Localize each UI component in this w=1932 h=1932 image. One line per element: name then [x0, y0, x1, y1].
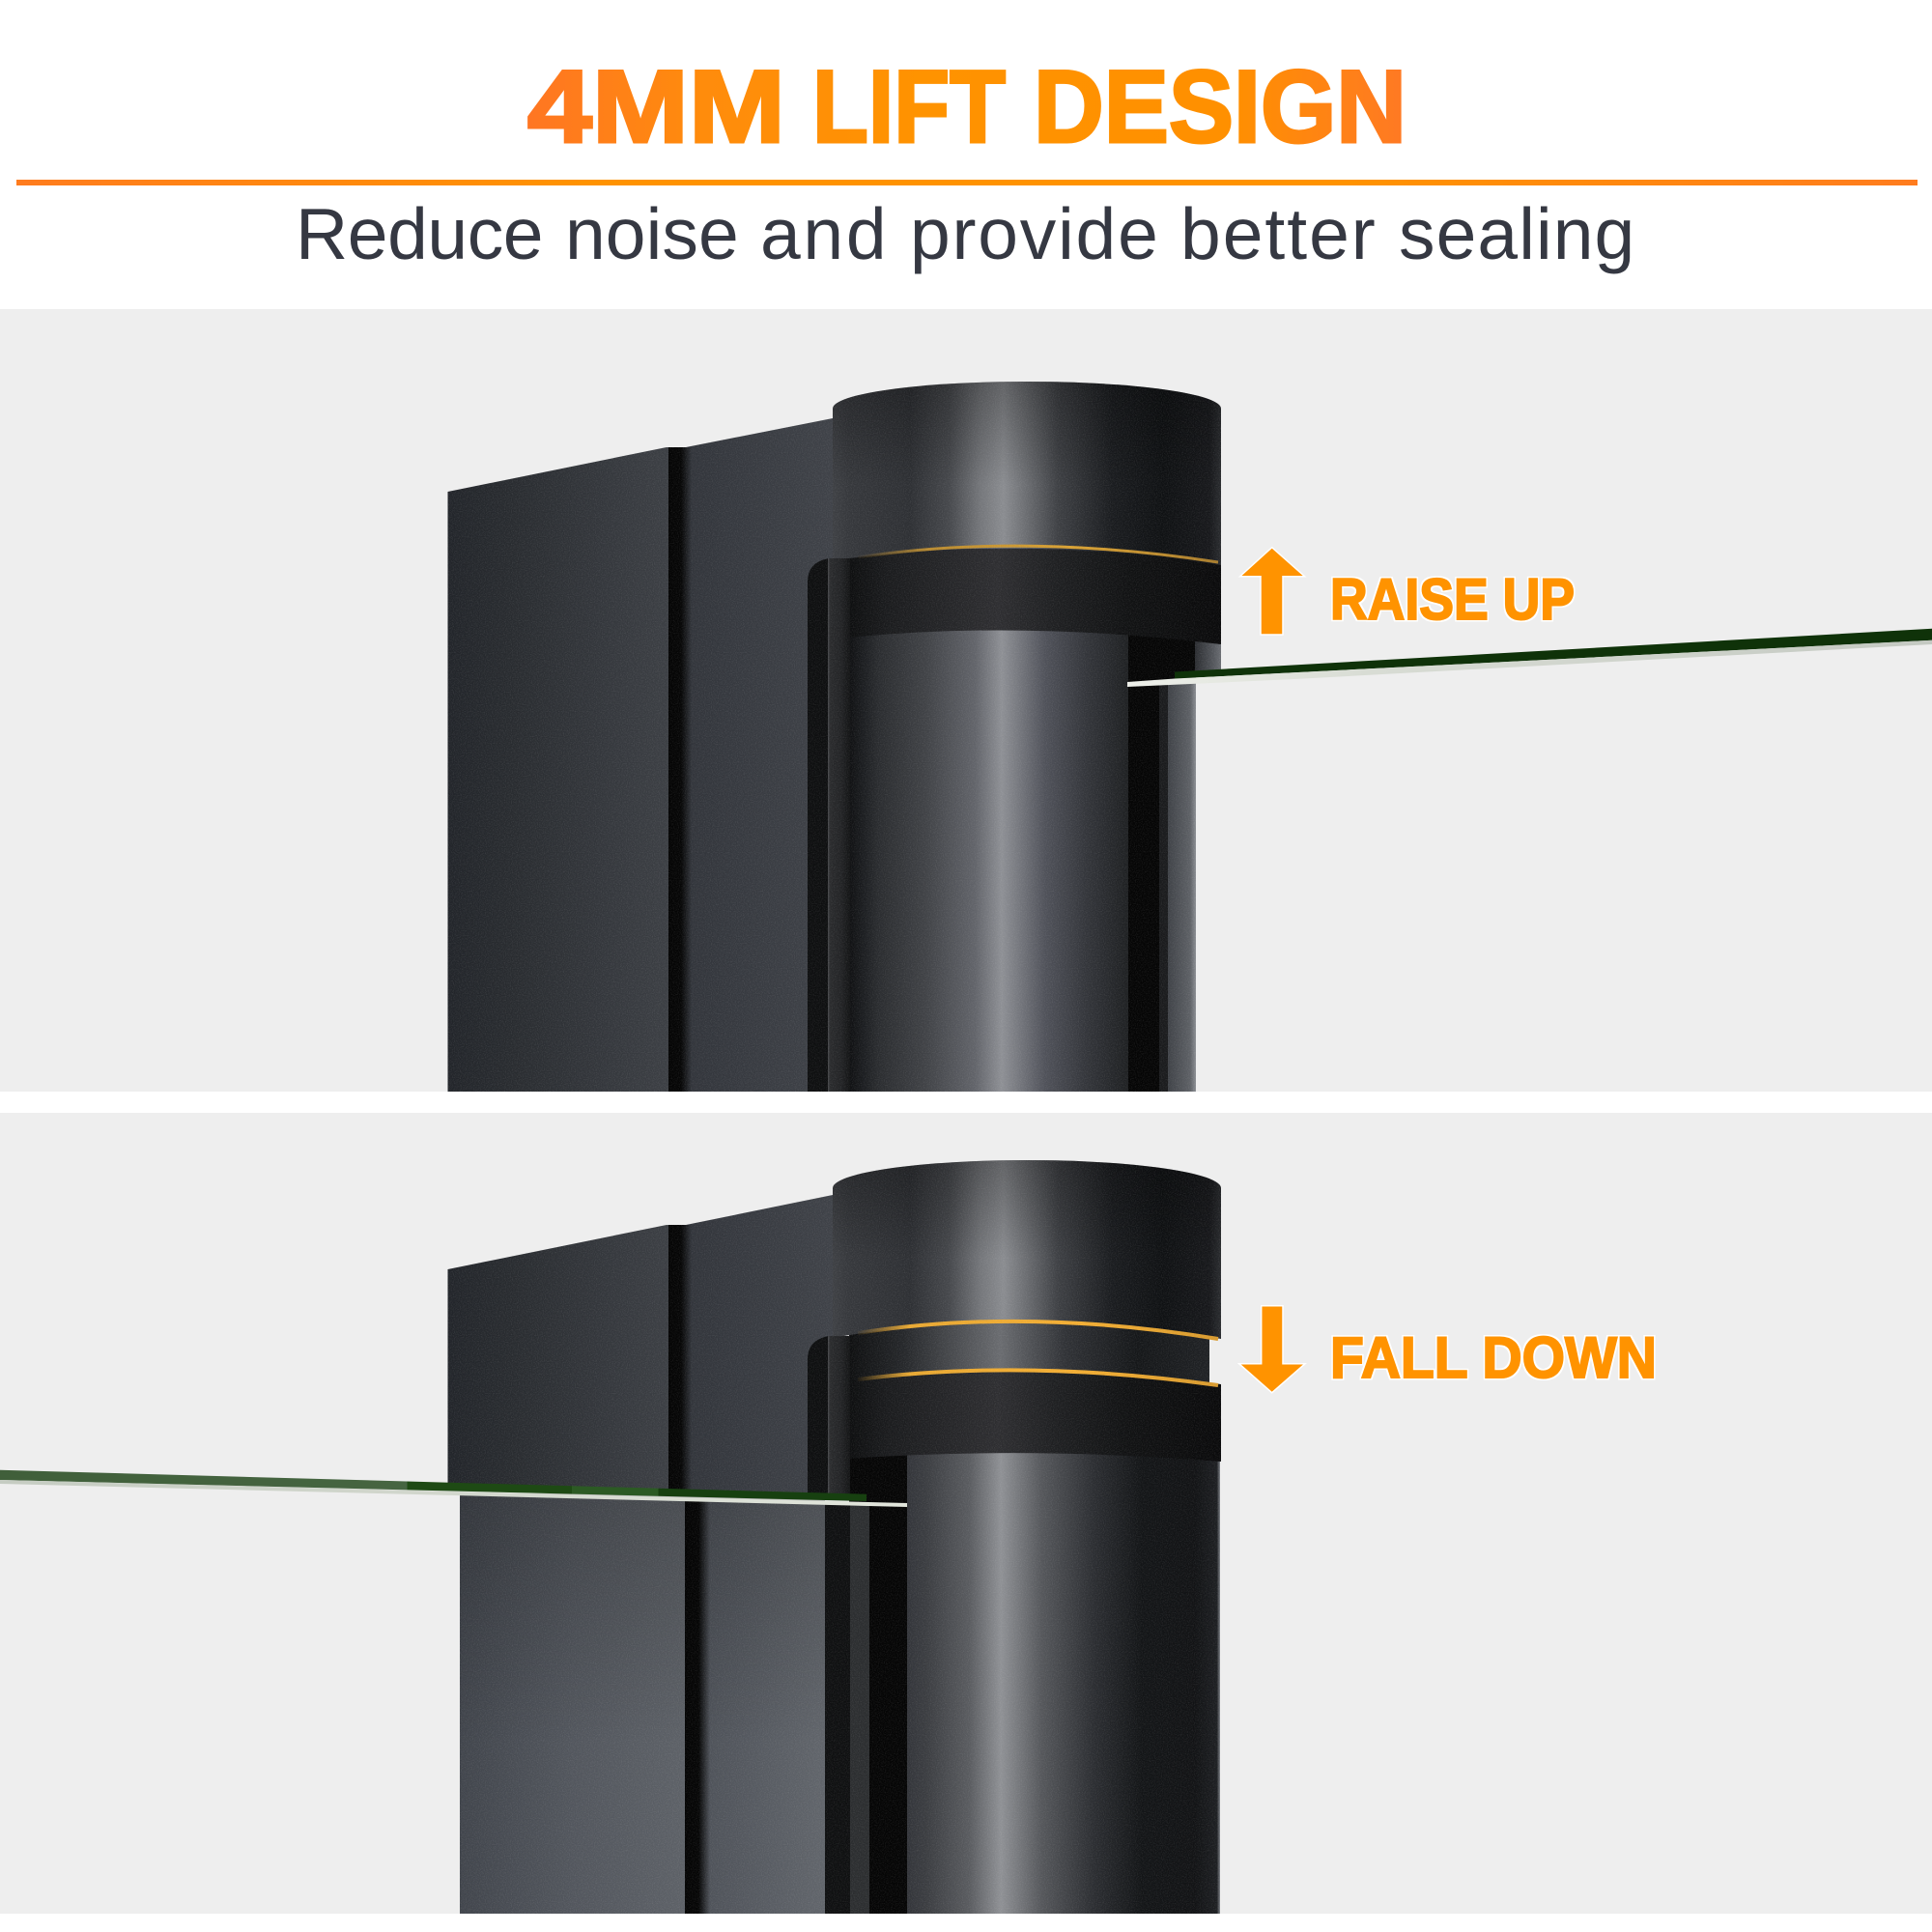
door profile left face above glass — [448, 1225, 669, 1493]
subtitle: and — [760, 193, 889, 274]
hinge strip below glass — [825, 1502, 869, 1914]
panel background — [0, 309, 1932, 1092]
door profile right face — [669, 418, 833, 1092]
subtitle: better — [1180, 193, 1378, 274]
open gap beside the cylinder — [1128, 623, 1196, 1092]
orange seal line — [858, 546, 1218, 562]
cylinder cap — [833, 1160, 1221, 1339]
title: LIFT — [812, 48, 1006, 164]
hinge strip ridge above glass — [828, 1336, 850, 1500]
title — [527, 48, 1406, 164]
black collar band — [849, 1370, 1221, 1462]
subtitle: provide — [910, 193, 1160, 274]
icon: down arrow — [1239, 1306, 1305, 1393]
door right face below glass — [685, 1499, 825, 1914]
glass panel edge — [1127, 629, 1932, 687]
icon: up arrow — [1240, 548, 1305, 635]
vertical hinge strip — [808, 558, 850, 1092]
label: fall down: FALL DOWN — [1330, 1325, 1657, 1390]
hinge strip ridge below glass — [850, 1504, 869, 1914]
glass panel edge — [0, 1470, 907, 1507]
title: 4MM — [527, 48, 785, 164]
inner ring between seals — [849, 1314, 1209, 1391]
panel: raised door position — [0, 309, 1932, 1092]
open gap — [849, 1454, 907, 1914]
lower cylinder — [907, 1447, 1220, 1914]
upper cylinder cap — [833, 382, 1221, 570]
title divider line — [16, 180, 1918, 185]
door profile right face above glass — [669, 1195, 833, 1499]
gap inner wall below glass — [1159, 684, 1168, 1092]
subtitle: sealing — [1399, 193, 1635, 274]
label: raise up: RAISE UP — [1330, 567, 1575, 632]
door left face below glass — [460, 1493, 685, 1914]
hinge strip ridge — [828, 558, 850, 1092]
gap wall above glass — [1195, 633, 1221, 671]
door profile left face — [448, 447, 669, 1092]
groove between faces — [668, 447, 692, 1092]
hinge assembly raised — [448, 382, 1221, 1092]
panel: lowered door position — [0, 1113, 1932, 1914]
hinge assembly lowered — [448, 1160, 1221, 1914]
black collar band — [849, 549, 1221, 644]
upper orange seal line — [858, 1321, 1218, 1339]
gap wall gradient below glass — [1168, 680, 1196, 1092]
shading over lower door faces — [460, 1493, 825, 1914]
subtitle: Reduce — [296, 193, 543, 274]
subtitle: noise — [565, 193, 739, 274]
vertical hinge strip above glass — [808, 1336, 850, 1499]
panel background — [0, 1113, 1932, 1914]
groove below glass — [685, 1499, 710, 1914]
inner cylinder — [850, 623, 1128, 1092]
title: DESIGN — [1034, 48, 1406, 164]
lower orange seal line — [858, 1370, 1218, 1385]
groove above glass — [668, 1225, 692, 1495]
